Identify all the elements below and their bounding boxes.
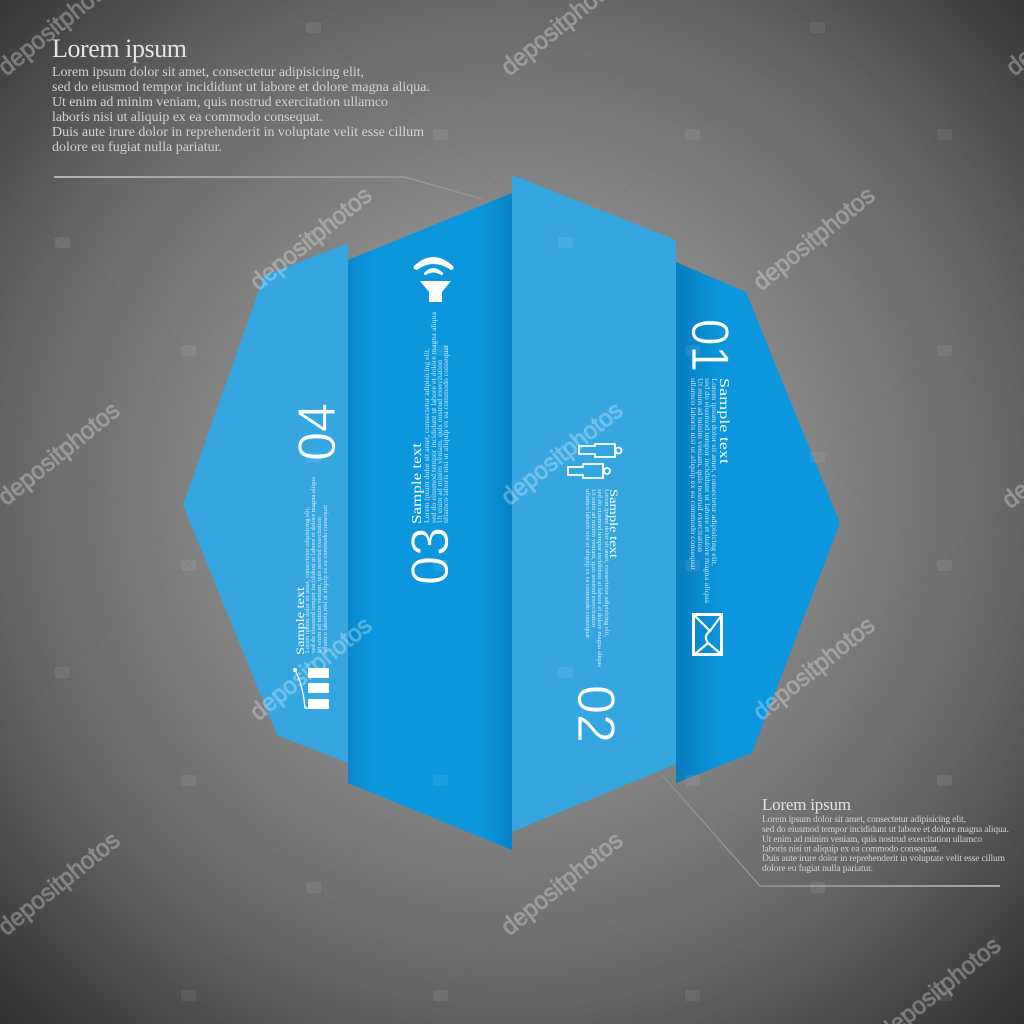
body: bottom callout: dolore eu fugiat nulla pariatur.: [762, 863, 873, 874]
text block: top callout: [52, 34, 430, 155]
body text 04: [305, 477, 329, 653]
heading: sample text 04: Sample text: [295, 586, 307, 655]
heading: bottom callout: Lorem ipsum: [762, 795, 851, 814]
panel: strip 04: [183, 243, 348, 763]
body: bottom callout: Ut enim ad minim veniam, quis nostrud exercitation ullamco: [762, 835, 982, 845]
watermark overlay: depositphotos: [748, 611, 880, 726]
number 03: 03: [401, 527, 460, 585]
icon: plugs: [568, 444, 622, 478]
icon: bars with curve: [293, 668, 329, 709]
body text 02: sed do eiusmod tempor incididunt ut labore et dolore magna aliqua: [596, 489, 602, 667]
strip 03 content: [401, 257, 460, 585]
body: top callout: Lorem ipsum dolor sit amet, consectetur adipisicing elit,: [52, 65, 364, 80]
body: top callout: laboris nisi ut aliquip ex ea commodo consequat.: [52, 110, 323, 125]
watermark overlay: depositphotos: [245, 181, 377, 296]
heading: sample text 01: Sample text: [716, 378, 731, 464]
body: bottom callout: laboris nisi ut aliquip ex ea commodo consequat.: [762, 844, 939, 854]
body text 03: [423, 311, 450, 523]
heading: sample text 02: Sample text: [607, 489, 619, 559]
icon: wireless speaker: [413, 257, 454, 302]
octagon diagram: [183, 175, 840, 850]
body text 01: sed do eiusmod tempor incididunt ut labore et dolore magna aliqua: [703, 378, 711, 604]
strip 04 content: [288, 403, 347, 709]
connector line: top callout: [54, 177, 482, 199]
panel: strip 03: [348, 193, 512, 850]
body text 01: Ut enim ad minim veniam, quis nostrud exercitation: [696, 378, 704, 553]
text block: bottom callout: [762, 795, 1009, 874]
body: bottom callout: sed do eiusmod tempor incididunt ut labore et dolore magna aliqua.: [762, 825, 1009, 835]
heading: sample text 03: Sample text: [409, 443, 424, 524]
body text 03: sed do eiusmod tempor incididunt ut labore et dolore magna aliqua: [430, 311, 438, 523]
body: top callout: Ut enim ad minim veniam, quis nostrud exercitation ullamco: [52, 95, 388, 110]
body text 01: [689, 378, 718, 604]
body text 04: sed do eiusmod tempor incididunt ut labore et dolore magna aliqua: [311, 477, 317, 653]
body: top callout: Duis aute irure dolor in reprehenderit in voluptate velit esse cillum: [52, 125, 424, 140]
body: top callout: [52, 65, 430, 155]
body text 02: Lorem ipsum dolor sit amet, consectetur adipisicing elit,: [603, 489, 609, 638]
body text 02: ullamco laboris nisi ut aliquip ex ea commodo consequat: [584, 489, 590, 638]
watermark overlay: depositphotos: [245, 611, 377, 726]
body text 03: Ut enim ad minim veniam, quis nostrud exercitation: [436, 359, 444, 523]
number 02: 02: [566, 685, 625, 743]
body text 03: ullamco laboris nisi ut aliquip ex ea commodo consequat: [442, 345, 450, 523]
panel: strip 02: [512, 175, 676, 832]
body text 04: ullamco laboris nisi ut aliquip ex ea commodo consequat: [323, 505, 329, 653]
body: bottom callout: Duis aute irure dolor in reprehenderit in voluptate velit esse cillum: [762, 854, 1006, 864]
body text 01: Lorem ipsum dolor sit amet, consectetur adipisicing elit,: [710, 378, 718, 566]
strip 02 content: [566, 444, 625, 743]
heading: top callout: Lorem ipsum: [52, 34, 187, 63]
panel: strip 01: [676, 262, 840, 783]
number 01: 01: [680, 319, 739, 372]
strip 01 content: [680, 319, 739, 654]
watermark overlay: depositphotos: [496, 826, 628, 941]
connector line: bottom callout: [662, 775, 1000, 886]
body: bottom callout: Lorem ipsum dolor sit amet, consectetur adipisicing elit,: [762, 815, 966, 825]
body text 03: Lorem ipsum dolor sit amet, consectetur adipisicing elit,: [423, 348, 431, 523]
body text 02: Ut enim ad minim veniam, quis nostrud exercitation: [590, 489, 596, 627]
body text 04: Lorem ipsum dolor sit amet, consectetur adipisicing elit,: [305, 506, 311, 653]
body text 02: [584, 489, 609, 667]
number 04: 04: [288, 403, 347, 461]
body text 01: ullamco laboris nisi ut aliquip ex ea commodo consequat: [689, 378, 697, 570]
icon: envelope: [694, 614, 722, 654]
body: top callout: dolore eu fugiat nulla pariatur.: [52, 140, 222, 155]
watermark overlay: depositphotos: [748, 181, 880, 296]
watermark overlay: depositphotos: [496, 396, 628, 511]
body: bottom callout: [762, 815, 1009, 874]
body: top callout: sed do eiusmod tempor incididunt ut labore et dolore magna aliqua.: [52, 80, 430, 95]
body text 04: Ut enim ad minim veniam, quis nostrud exercitation: [317, 517, 323, 653]
